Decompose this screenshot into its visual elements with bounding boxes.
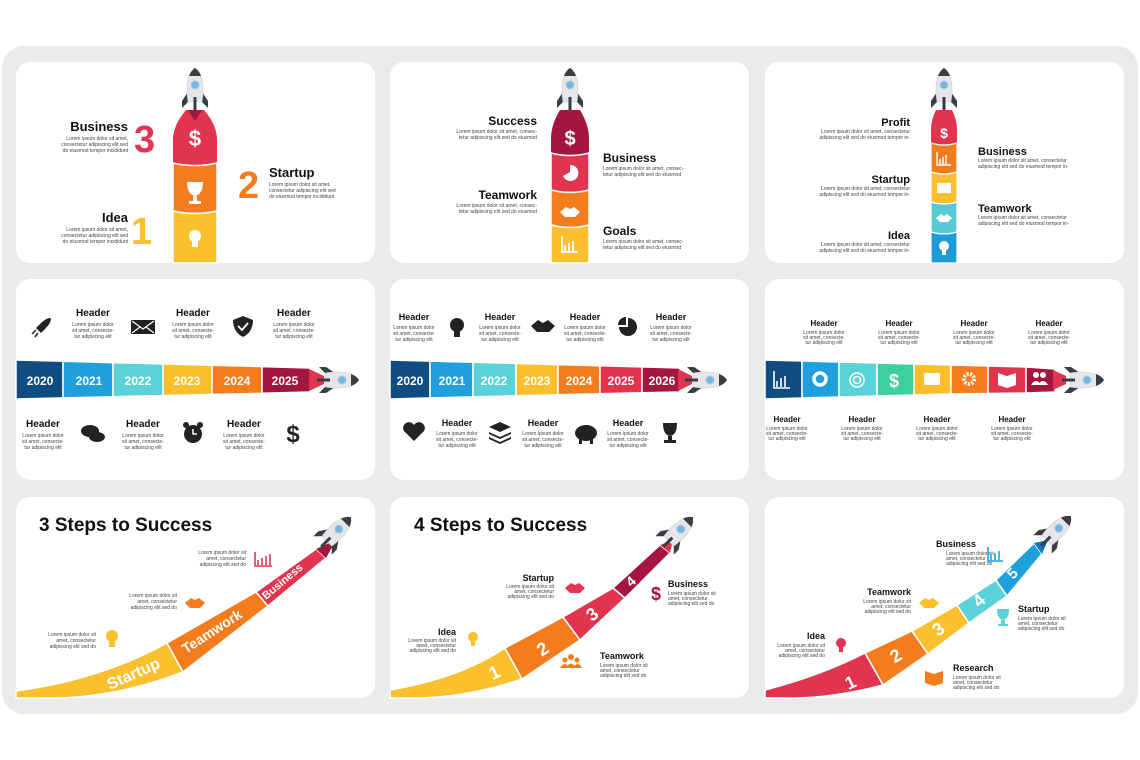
header blocks top: Lorem ipsum dolor — [393, 325, 435, 331]
header blocks top: Header — [76, 308, 110, 319]
header blocks bottom: sit amet, consecte- — [916, 431, 958, 437]
item Success: tetur adipiscing elit sed do eiusmod — [459, 135, 537, 141]
step 3 Business — [61, 119, 155, 161]
step 2 Startup: 2 — [238, 165, 259, 207]
header blocks top: Header — [399, 312, 430, 322]
icon: bulb — [106, 630, 118, 647]
header blocks bottom: tur adipiscing elit — [609, 443, 647, 449]
header blocks bottom: Header — [528, 418, 559, 428]
item Goals — [603, 224, 684, 251]
item Startup: Startup — [1018, 604, 1050, 614]
header blocks bottom: sit amet, consecte- — [122, 439, 164, 445]
header blocks top: Header — [885, 319, 913, 328]
step numbers: 3 — [928, 618, 948, 640]
header blocks bottom: tur adipiscing elit — [843, 436, 881, 442]
header blocks bottom: Lorem ipsum dolor — [916, 426, 958, 432]
band labels: Teamwork — [179, 606, 245, 657]
header blocks bottom: tur adipiscing elit — [225, 445, 263, 451]
item Research: Research — [953, 663, 994, 673]
item Business: tetur adipiscing elit sed do eiusmod — [603, 172, 681, 178]
item Goals: tetur adipiscing elit sed do eiusmod — [603, 245, 681, 251]
year labels: 2024 — [566, 374, 593, 388]
header blocks top: tur adipiscing elit — [805, 340, 843, 346]
header blocks top: tur adipiscing elit — [955, 340, 993, 346]
item Success — [456, 114, 537, 141]
step numbers — [842, 565, 1022, 694]
step 3 Business: 3 — [134, 119, 155, 161]
icon: envelope — [131, 320, 155, 334]
item Startup — [506, 573, 555, 600]
item Teamwork: Lorem ipsum dolor sit amet, consectetur — [978, 215, 1067, 221]
step 3 Business: consectetur adipiscing elit sed — [61, 142, 128, 148]
item Profit: adipiscing elit sed do eiusmod tempor in- — [819, 135, 910, 141]
year labels — [397, 374, 676, 388]
item Business — [936, 539, 994, 567]
header blocks top: tur adipiscing elit — [395, 337, 433, 343]
rocket — [1032, 507, 1080, 555]
item Teamwork: Lorem ipsum dolor sit — [863, 599, 912, 605]
band labels: Startup — [105, 655, 163, 694]
item Teamwork: adipiscing elit sed do — [600, 673, 647, 679]
item Research: Lorem ipsum dolor sit — [953, 675, 1001, 681]
header blocks bottom: sit amet, consecte- — [436, 437, 478, 443]
header blocks top: sit amet, consecte- — [878, 335, 920, 341]
item Teamwork: Teamwork — [600, 651, 645, 661]
icon: shield — [233, 316, 253, 337]
icon: chat bubbles — [81, 425, 105, 442]
item Teamwork — [978, 203, 1069, 227]
panel: timeline 2020-2025 — [16, 279, 375, 480]
header blocks top: Lorem ipsum dolor — [953, 330, 995, 336]
item Idea: amet, consectetur — [785, 648, 825, 654]
item Teamwork — [863, 587, 912, 615]
bar icons — [774, 371, 1048, 391]
rocket — [182, 68, 208, 110]
step numbers — [486, 573, 639, 684]
item Business — [978, 146, 1069, 170]
icon: bulb — [836, 638, 846, 652]
item Startup: Startup — [522, 573, 555, 583]
icon: book — [925, 671, 943, 686]
item Profit: Lorem ipsum dolor sit amet, consectetur — [821, 129, 910, 135]
header blocks top: Lorem ipsum dolor — [564, 325, 606, 331]
item business: adipiscing elit sed do — [200, 562, 246, 568]
header blocks bottom: Header — [998, 415, 1026, 424]
header blocks top: tur adipiscing elit — [481, 337, 519, 343]
header blocks top: sit amet, consecte- — [803, 335, 845, 341]
item Business — [668, 579, 716, 607]
year labels: 2025 — [272, 374, 299, 388]
icon: trophy — [997, 609, 1009, 626]
header blocks top: Header — [176, 308, 210, 319]
item Research: amet, consectetur — [953, 680, 993, 686]
item Idea: Idea — [888, 230, 911, 242]
header blocks bottom: Lorem ipsum dolor — [223, 433, 265, 439]
step 1 Idea: 1 — [131, 211, 152, 253]
header blocks bottom: sit amet, consecte- — [522, 437, 564, 443]
year labels: 2025 — [608, 374, 635, 388]
year labels: 2022 — [125, 374, 152, 388]
item Idea: Idea — [438, 627, 457, 637]
header blocks bottom: sit amet, consecte- — [991, 431, 1033, 437]
header blocks bottom: sit amet, consecte- — [22, 439, 64, 445]
rocket column: $ — [564, 128, 576, 150]
header blocks top: sit amet, consecte- — [172, 328, 214, 334]
header blocks top: Lorem ipsum dolor — [273, 322, 315, 328]
curved band — [16, 540, 336, 698]
step 1 Idea: consectetur adipiscing elit sed — [61, 233, 128, 239]
icon: people — [560, 654, 582, 668]
item Idea: adipiscing elit sed do eiusmod tempor in- — [819, 248, 910, 254]
header blocks top: tur adipiscing elit — [74, 334, 112, 340]
header blocks top: tur adipiscing elit — [174, 334, 212, 340]
icon: dollar: $ — [286, 421, 300, 448]
item Startup: adipiscing elit sed do — [1018, 626, 1065, 632]
header blocks bottom: Header — [923, 415, 951, 424]
curved band — [765, 540, 1048, 698]
item Teamwork — [600, 651, 648, 679]
year labels: 2024 — [224, 374, 251, 388]
header blocks top: Lorem ipsum dolor — [172, 322, 214, 328]
icon: pie — [618, 317, 637, 336]
item Teamwork: amet, consectetur — [600, 668, 640, 674]
rocket column: $ — [940, 125, 948, 141]
item Business: Business — [978, 146, 1027, 158]
icon: chart — [988, 547, 1003, 561]
year labels: 2023 — [174, 374, 201, 388]
header blocks bottom: tur adipiscing elit — [438, 443, 476, 449]
header blocks bottom: sit amet, consecte- — [841, 431, 883, 437]
step 2 Startup — [238, 165, 336, 207]
header blocks top — [72, 308, 315, 340]
step numbers: 5 — [1004, 565, 1022, 583]
item Business: Lorem ipsum dolor sit amet, consectetur — [978, 158, 1067, 164]
item Teamwork: Teamwork — [978, 203, 1032, 215]
step 2 Startup: Lorem ipsum dolor sit amet, — [269, 182, 331, 188]
step 2 Startup: do eiusmod tempor incididunt — [269, 194, 335, 200]
header blocks bottom: Header — [442, 418, 473, 428]
header blocks bottom: Lorem ipsum dolor — [841, 426, 883, 432]
year labels: 2026 — [649, 374, 676, 388]
icon: heart — [403, 422, 425, 441]
item Success: Success — [488, 114, 537, 128]
item Startup: adipiscing elit sed do — [508, 594, 554, 600]
header blocks top: tur adipiscing elit — [1030, 340, 1068, 346]
item Startup: amet, consectetur — [1018, 621, 1058, 627]
item Teamwork — [456, 188, 537, 215]
step 3 Business: do eiusmod tempor incididunt — [63, 148, 129, 154]
step numbers: 4 — [969, 590, 989, 611]
panel: icon timeline — [765, 279, 1124, 480]
item Teamwork: Lorem ipsum dolor sit — [600, 663, 648, 669]
rocket — [1062, 367, 1104, 393]
header blocks top: Lorem ipsum dolor — [479, 325, 521, 331]
year labels: 2021 — [439, 374, 466, 388]
step numbers: 1 — [842, 671, 859, 694]
header blocks top: sit amet, consecte- — [273, 328, 315, 334]
item Success: Lorem ipsum dolor sit amet, consec- — [456, 129, 537, 135]
year labels: 2021 — [76, 374, 103, 388]
icon: rocket — [32, 318, 51, 337]
item Business: Lorem ipsum dolor sit — [946, 551, 994, 557]
header blocks top: Header — [277, 308, 311, 319]
item Startup: Startup — [872, 174, 910, 186]
icon: alarm clock — [183, 422, 203, 443]
icon: handshake — [185, 598, 205, 608]
icon: layers — [489, 422, 511, 444]
panel: timeline 2020-2026 — [390, 279, 749, 480]
header blocks top: Lorem ipsum dolor — [72, 322, 114, 328]
step 3 Business: Lorem ipsum dolor sit amet, — [66, 136, 128, 142]
item business: amet, consectetur — [206, 556, 246, 562]
rocket column — [173, 110, 217, 263]
item Goals: Lorem ipsum dolor sit amet, consec- — [603, 239, 684, 245]
header blocks top: Header — [1035, 319, 1063, 328]
item idea: amet, consectetur — [56, 638, 96, 644]
panel: 5 steps — [765, 497, 1124, 698]
item Startup: Lorem ipsum dolor sit — [506, 584, 555, 590]
rocket column: $ — [189, 126, 201, 151]
header blocks bottom: Lorem ipsum dolor — [22, 433, 64, 439]
step 1 Idea: Idea — [102, 210, 129, 225]
header blocks top — [803, 319, 1070, 346]
header blocks bottom: Header — [126, 419, 160, 430]
header blocks top: sit amet, consecte- — [953, 335, 995, 341]
item Idea: Idea — [807, 631, 826, 641]
icon: handshake — [531, 320, 555, 332]
item Business: Business — [936, 539, 976, 549]
item Idea: Lorem ipsum dolor sit — [777, 643, 826, 649]
header blocks top: tur adipiscing elit — [652, 337, 690, 343]
header blocks top: sit amet, consecte- — [650, 331, 692, 337]
item Business: adipiscing elit sed do — [946, 561, 993, 567]
header blocks bottom: tur adipiscing elit — [524, 443, 562, 449]
header blocks top: tur adipiscing elit — [880, 340, 918, 346]
header blocks top: Header — [810, 319, 838, 328]
title: 3 Steps to Success — [39, 515, 212, 536]
timeline bar — [16, 360, 324, 399]
step numbers: 4 — [622, 573, 639, 590]
step numbers: 2 — [886, 645, 905, 667]
year labels: 2020 — [27, 374, 54, 388]
header blocks top: tur adipiscing elit — [275, 334, 313, 340]
item idea: Lorem ipsum dolor sit — [48, 632, 97, 638]
item Research — [953, 663, 1001, 691]
step numbers: 2 — [533, 638, 552, 660]
item Startup — [819, 174, 910, 198]
header blocks bottom: sit amet, consecte- — [766, 431, 808, 437]
icon: handshake — [565, 583, 585, 593]
year labels — [27, 374, 299, 388]
item Startup: adipiscing elit sed do eiusmod tempor in- — [819, 192, 910, 198]
header blocks top: Lorem ipsum dolor — [878, 330, 920, 336]
item teamwork — [129, 593, 178, 611]
item business — [198, 550, 247, 568]
rocket column — [551, 110, 589, 263]
item Idea: Lorem ipsum dolor sit amet, consectetur — [821, 242, 910, 248]
icon: bulb — [468, 632, 478, 646]
header blocks top: sit amet, consecte- — [72, 328, 114, 334]
item Idea — [408, 627, 457, 654]
panel: vertical rocket 4 steps — [390, 62, 749, 263]
item Business: Lorem ipsum dolor sit amet, consec- — [603, 166, 684, 172]
header blocks top: Header — [960, 319, 988, 328]
item Idea — [819, 230, 911, 254]
item idea — [48, 632, 97, 650]
item Profit: Profit — [881, 117, 910, 129]
header blocks bottom: Lorem ipsum dolor — [122, 433, 164, 439]
item teamwork: Lorem ipsum dolor sit — [129, 593, 178, 599]
header blocks bottom — [766, 415, 1033, 442]
item Business: adipiscing elit sed do — [668, 601, 715, 607]
item Teamwork: amet, consectetur — [871, 604, 911, 610]
year labels: 2022 — [481, 374, 508, 388]
item Teamwork: Lorem ipsum dolor sit amet, consec- — [456, 203, 537, 209]
item Business: Business — [603, 151, 657, 165]
header blocks top: sit amet, consecte- — [564, 331, 606, 337]
header blocks bottom: sit amet, consecte- — [607, 437, 649, 443]
header blocks bottom: tur adipiscing elit — [124, 445, 162, 451]
item Goals: Goals — [603, 224, 637, 238]
header blocks top: Lorem ipsum dolor — [803, 330, 845, 336]
header blocks bottom — [22, 419, 265, 451]
header blocks top: Lorem ipsum dolor — [650, 325, 692, 331]
bar icons: $ — [889, 371, 899, 391]
step 3 Business: Business — [70, 119, 128, 134]
rocket — [312, 508, 360, 556]
timeline bar — [390, 360, 692, 399]
item Business: amet, consectetur — [668, 596, 708, 602]
step 1 Idea: Lorem ipsum dolor sit amet, — [66, 227, 128, 233]
rocket — [557, 68, 583, 110]
title: 4 Steps to Success — [414, 515, 587, 536]
item Teamwork: adipiscing elit sed do eiusmod tempor in- — [978, 221, 1069, 227]
band labels: Business — [260, 562, 305, 602]
header blocks top: sit amet, consecte- — [393, 331, 435, 337]
header blocks bottom: Header — [848, 415, 876, 424]
step 2 Startup: Startup — [269, 165, 315, 180]
rocket — [685, 367, 727, 393]
step numbers: 3 — [582, 603, 602, 625]
icon: bulb — [450, 318, 464, 337]
header blocks bottom: tur adipiscing elit — [993, 436, 1031, 442]
item Research: adipiscing elit sed do — [953, 685, 1000, 691]
step 1 Idea — [61, 210, 152, 253]
header blocks top: sit amet, consecte- — [1028, 335, 1070, 341]
header blocks top: tur adipiscing elit — [566, 337, 604, 343]
item teamwork: amet, consectetur — [137, 599, 177, 605]
timeline bar — [765, 360, 1066, 399]
header blocks bottom: Header — [773, 415, 801, 424]
year labels: 2023 — [524, 374, 551, 388]
item Teamwork: adipiscing elit sed do — [865, 609, 911, 615]
item Startup: Lorem ipsum dolor sit — [1018, 616, 1066, 622]
icon: piggy bank — [575, 425, 597, 444]
step 2 Startup: consectetur adipiscing elit sed — [269, 188, 336, 194]
panel: vertical rocket 5 steps — [765, 62, 1124, 263]
panel: 4 steps to success — [390, 497, 749, 698]
item Startup — [1018, 604, 1066, 632]
header blocks top: Header — [485, 312, 516, 322]
header blocks bottom: Header — [26, 419, 60, 430]
rocket — [654, 508, 702, 556]
item teamwork: adipiscing elit sed do — [131, 605, 177, 611]
item Idea — [777, 631, 826, 659]
header blocks top — [393, 312, 692, 343]
header blocks bottom: Header — [227, 419, 261, 430]
year labels: 2020 — [397, 374, 424, 388]
item Teamwork: Teamwork — [479, 188, 537, 202]
panel: vertical rocket 3 steps — [16, 62, 375, 263]
header blocks bottom: Lorem ipsum dolor — [991, 426, 1033, 432]
header blocks top: Lorem ipsum dolor — [1028, 330, 1070, 336]
step 1 Idea: do eiusmod tempor incididunt — [63, 239, 129, 245]
header blocks top: sit amet, consecte- — [479, 331, 521, 337]
icon: dollar: $ — [651, 584, 661, 604]
item Idea: adipiscing elit sed do — [410, 648, 456, 654]
header blocks bottom: sit amet, consecte- — [223, 439, 265, 445]
item Startup: amet, consectetur — [514, 589, 554, 595]
rocket — [931, 68, 957, 110]
item Startup: Lorem ipsum dolor sit amet, consectetur — [821, 186, 910, 192]
item Business: Business — [668, 579, 708, 589]
curved band — [390, 540, 673, 698]
header blocks bottom: Header — [613, 418, 644, 428]
item Profit — [819, 117, 910, 141]
header blocks bottom: Lorem ipsum dolor — [766, 426, 808, 432]
item business: Lorem ipsum dolor sit — [198, 550, 247, 556]
icon: handshake — [919, 598, 939, 608]
header blocks bottom: tur adipiscing elit — [24, 445, 62, 451]
item Business: adipiscing elit sed do eiusmod tempor in- — [978, 164, 1069, 170]
header blocks bottom: Lorem ipsum dolor — [436, 431, 478, 437]
header blocks top: Header — [656, 312, 687, 322]
header blocks bottom: Lorem ipsum dolor — [607, 431, 649, 437]
header blocks top: Header — [570, 312, 601, 322]
icon: trophy — [663, 423, 677, 443]
item Teamwork: tetur adipiscing elit sed do eiusmod — [459, 209, 537, 215]
header blocks bottom: tur adipiscing elit — [918, 436, 956, 442]
item Business: amet, consectetur — [946, 556, 986, 562]
item idea: adipiscing elit sed do — [50, 644, 96, 650]
item Business: Lorem ipsum dolor sit — [668, 591, 716, 597]
item Teamwork: Teamwork — [867, 587, 912, 597]
rocket — [317, 367, 359, 393]
header blocks bottom — [436, 418, 649, 449]
icon: chart — [255, 552, 272, 566]
rocket column — [931, 110, 957, 263]
header blocks bottom: Lorem ipsum dolor — [522, 431, 564, 437]
item Idea: Lorem ipsum dolor sit — [408, 638, 457, 644]
band labels — [105, 562, 305, 694]
item Idea: adipiscing elit sed do — [779, 653, 825, 659]
header blocks bottom: tur adipiscing elit — [768, 436, 806, 442]
panel: 3 steps to success — [16, 497, 375, 698]
item Business — [603, 151, 684, 178]
step numbers: 1 — [486, 661, 503, 684]
item Idea: amet, consectetur — [416, 643, 456, 649]
